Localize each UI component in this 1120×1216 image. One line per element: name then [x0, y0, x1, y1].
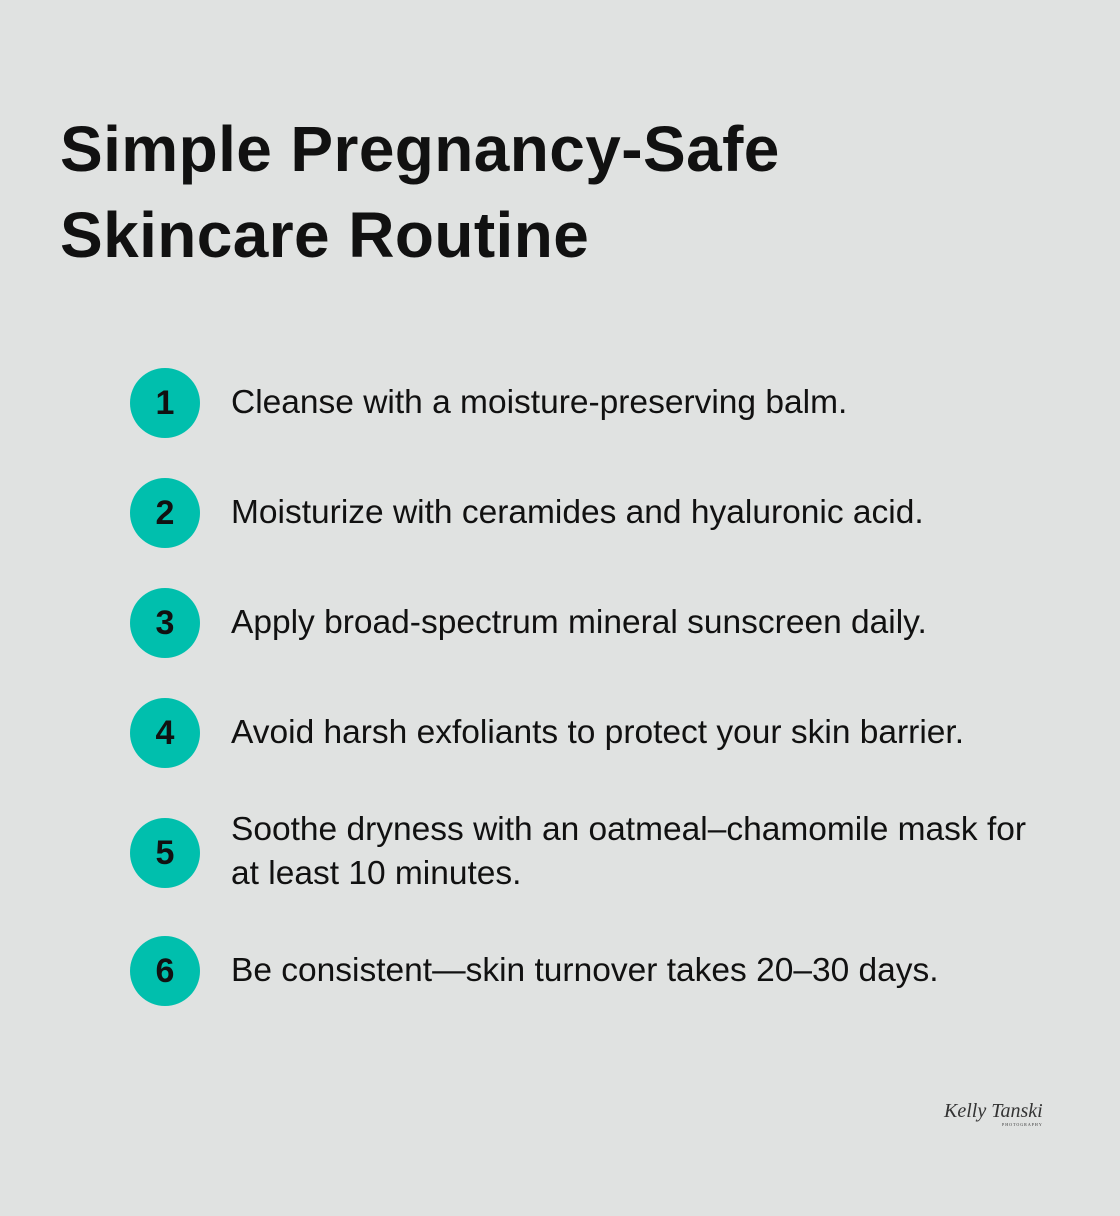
title: Simple Pregnancy-Safe: [60, 113, 780, 185]
step 5: at least 10 minutes.: [231, 855, 522, 892]
step 1: [130, 368, 847, 438]
logo signature: Kelly Tanski: [944, 1100, 1043, 1122]
logo signature: PHOTOGRAPHY: [1002, 1122, 1043, 1127]
title: Skincare Routine: [60, 199, 589, 271]
step 2: [130, 478, 924, 548]
step 3: [130, 588, 927, 658]
step 3: Apply broad-spectrum mineral sunscreen daily.: [231, 604, 927, 641]
step 5: [130, 811, 1026, 892]
step 1: 1: [156, 384, 174, 422]
step 4: Avoid harsh exfoliants to protect your skin barrier.: [231, 714, 964, 751]
step 1: Cleanse with a moisture-preserving balm.: [231, 384, 847, 421]
step 2: Moisturize with ceramides and hyaluronic acid.: [231, 494, 924, 531]
step 6: Be consistent—skin turnover takes 20–30 days.: [231, 952, 939, 989]
step 4: 4: [156, 714, 174, 752]
step 2: 2: [156, 494, 174, 532]
step 3: 3: [156, 604, 174, 642]
step 5: 5: [156, 834, 174, 872]
step 6: 6: [156, 952, 174, 990]
step 6: [130, 936, 939, 1006]
step 4: [130, 698, 964, 768]
title: [60, 113, 780, 271]
step 5: Soothe dryness with an oatmeal–chamomile mask for: [231, 811, 1026, 848]
